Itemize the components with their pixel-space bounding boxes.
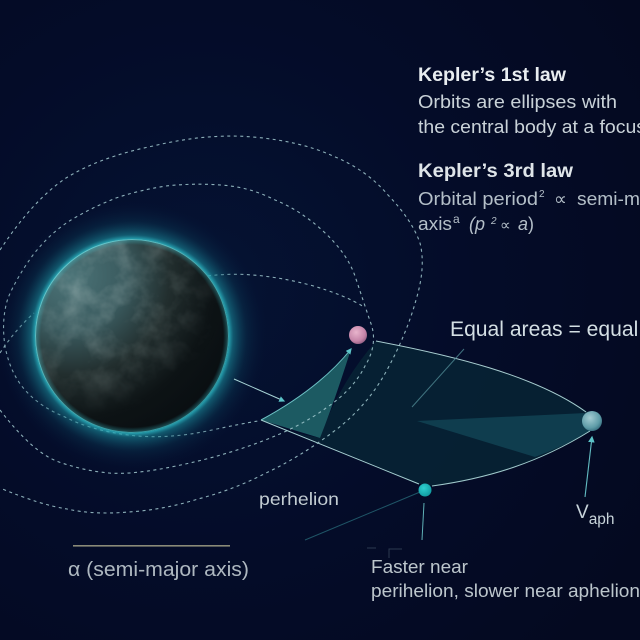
label: v aphelion: aph — [589, 511, 615, 528]
label: semi-major axis: α (semi-major axis) — [68, 559, 249, 581]
body: 3rd law line 2: ∝ — [500, 217, 511, 234]
label: speed note: Faster near — [371, 556, 468, 577]
Kepler's 1st law block — [418, 65, 640, 137]
big swept ellipse area — [296, 341, 591, 486]
planet glow — [0, 201, 267, 471]
label: perihelion: perhelion — [259, 489, 339, 509]
label: v aphelion: V — [576, 502, 589, 523]
body: 3rd law line 2: 2 — [490, 216, 497, 227]
body: 3rd law line 1 — [418, 189, 640, 209]
leader line under teal point — [422, 503, 424, 540]
semi-major axis rule — [73, 545, 230, 547]
velocity arrow at aphelion — [585, 437, 592, 497]
outer orbit — [0, 136, 422, 513]
body: 3rd law line 2 — [418, 212, 534, 234]
Kepler's 3rd law block — [418, 161, 640, 234]
aphelion swept wedge — [417, 413, 590, 457]
planet — [35, 239, 229, 433]
faint line from teal point — [305, 492, 420, 540]
heading: 1st law: Kepler’s 1st law — [418, 65, 566, 86]
ellipse lower edge — [432, 431, 590, 486]
body: 3rd law line 1: Orbital period — [418, 189, 538, 209]
label: speed note: perihelion, slower near aphelion — [371, 580, 640, 601]
ellipse upper edge — [376, 341, 586, 412]
label: speed note — [371, 556, 640, 601]
body: 3rd law line 2: (p — [469, 214, 485, 234]
planet: aphelion body — [582, 411, 602, 431]
body: 3rd law line 2: ) — [528, 214, 534, 234]
faint tick marks — [367, 548, 402, 558]
body: 3rd law line 1: 2 — [539, 189, 545, 200]
body: 3rd law line 2: a — [453, 212, 460, 226]
inner orbit arc — [208, 274, 364, 307]
dashed orbits — [0, 136, 422, 513]
body: 1st law line 2: the central body at a focus — [418, 116, 640, 137]
middle spiral orbit — [0, 184, 374, 473]
planet: perihelion body — [418, 484, 432, 496]
leader line from equal areas label — [412, 349, 464, 407]
body: 3rd law line 2: axis — [418, 214, 452, 234]
body: 1st law line 1: Orbits are ellipses with — [418, 91, 617, 112]
pointer arrow to perihelion wedge — [234, 379, 284, 401]
perihelion swept wedge — [261, 349, 419, 484]
planet: pink body — [349, 326, 367, 344]
heading: 3rd law: Kepler’s 3rd law — [418, 161, 573, 182]
body: 3rd law line 2: a — [518, 214, 528, 234]
body: 3rd law line 1: ∝ — [554, 189, 567, 209]
inner orbit left arc — [0, 313, 34, 353]
